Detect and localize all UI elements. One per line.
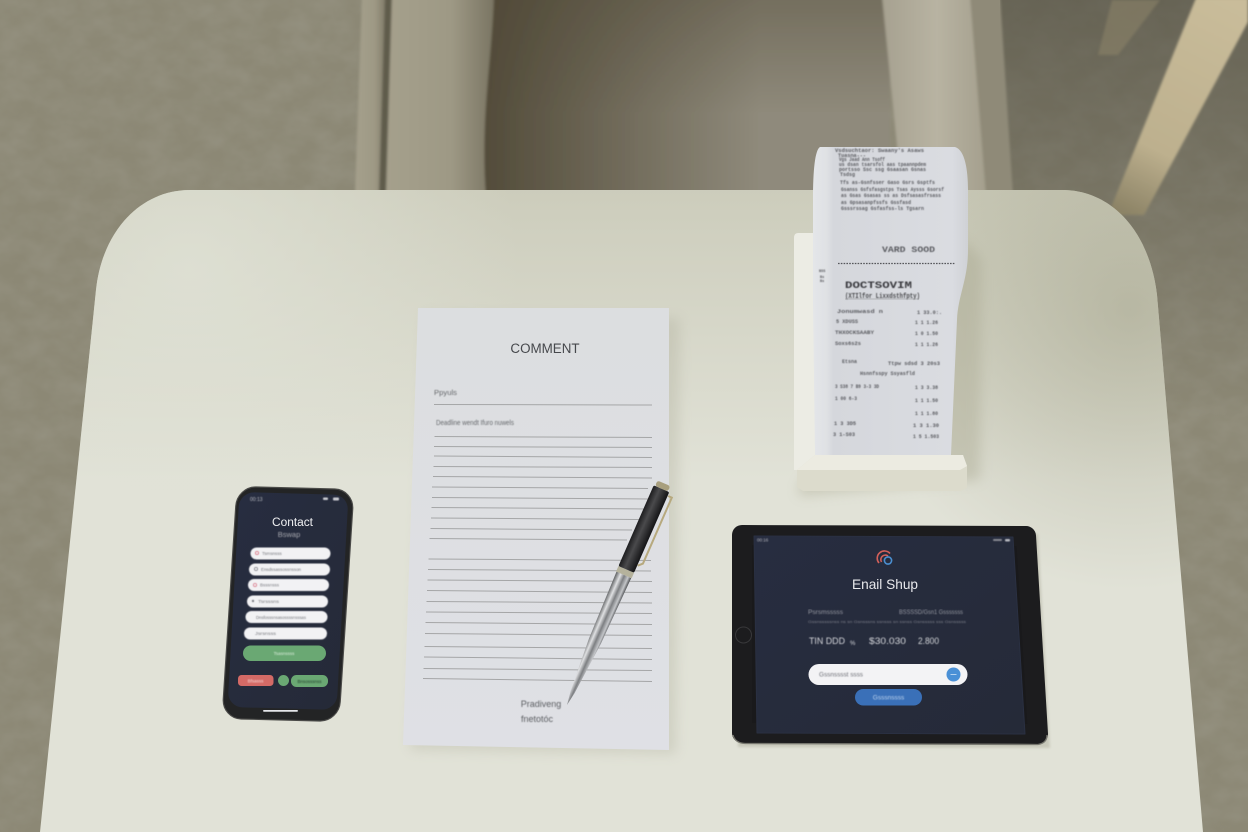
figures row: $30.030 (869, 636, 906, 646)
email input: Gssnsssst ssss (819, 672, 864, 678)
tablet title: Enail Shup (852, 576, 918, 592)
column labels: Psrsmsssss (808, 610, 843, 616)
email input (808, 664, 968, 685)
receipt line items: 1 0 1.50 (915, 330, 939, 337)
signup button: Gsssnssss (873, 694, 905, 702)
panel: smartphone contact form (222, 486, 354, 721)
receipt line items: 1 1 1.26 (915, 319, 939, 326)
receipt heading: DOCTSOVIM (845, 281, 912, 292)
receipt top text: portsso Ssc ssg Gsaasan Gsnas (839, 166, 927, 173)
receipt paper roll (813, 147, 968, 455)
receipt line items: Ttpw sdsd 3 20s3 (888, 360, 941, 367)
receipt subheading: (XTIlfor Lixxdsthfpty) (845, 293, 920, 301)
figures row: 2.800 (918, 636, 939, 646)
contact form fields: Bsssnsss (260, 582, 280, 588)
armchair behind the table (355, 0, 1013, 196)
roll edge marks (819, 270, 825, 284)
contact form fields: Tsrsssns (258, 599, 280, 604)
footer text line two: fnetotóc (521, 714, 554, 724)
printer base (797, 455, 967, 491)
status bar: 00:16 (757, 538, 769, 542)
field label: Ppyuls (434, 388, 457, 397)
figures row: % (850, 641, 856, 647)
contact form fields (244, 548, 330, 640)
panel: comment form sheet (403, 308, 680, 754)
receipt line items: 1 33.0:. (917, 309, 942, 316)
figures row: TIN DDD (809, 636, 845, 646)
receipt line items: THXOCKSAABY (835, 329, 875, 336)
receipt line items: 1 3 3D5 (834, 420, 857, 427)
receipt line items: Jonumwasd n (837, 308, 884, 315)
green pill button: Bnsosssnss (297, 679, 322, 684)
phone body (222, 486, 354, 721)
home button (736, 627, 752, 643)
receipt top text: as Gsas Gsasas ss as Dsfsasasfrsass (841, 192, 942, 199)
ruled lines (423, 404, 652, 682)
receipt line items: Hsnnfsspy Ssyasfld (860, 370, 915, 377)
contact form fields: Dnsfosssnsasossssnsssas (256, 615, 307, 620)
status bar: 00:13 (250, 497, 263, 503)
home indicator (263, 710, 298, 712)
roll edge marks: Bs (820, 276, 824, 280)
round green button (278, 675, 289, 686)
contact form fields: Ensdssassossnsson (261, 567, 301, 572)
icon: pen (559, 480, 676, 710)
receipt line items: 3 1-S03 (833, 431, 856, 438)
paper sheet (403, 308, 669, 750)
receipt line items: 5 XDUSS (836, 318, 859, 325)
footer text: Pradiveng (521, 699, 561, 709)
table top (40, 190, 1203, 832)
receipt top text: Tuasna--- (838, 152, 866, 159)
panel: receipt printer (794, 147, 982, 496)
contact form fields: Jsrsnsss (255, 631, 277, 636)
phone submit button: Tsasnssss (274, 651, 295, 656)
phone screen (228, 492, 349, 710)
dotted divider (838, 262, 955, 264)
receipt line items: 1 3 1.30 (913, 422, 940, 429)
wooden chair legs (1098, 0, 1248, 215)
contact form fields: Tsmsnsss (262, 551, 283, 556)
printer back plate (794, 233, 830, 470)
column labels: BSSSSD/Gsn1 Gsssssss (899, 610, 963, 616)
receipt top text: us dsan tsarsfol aas tpaannpdem (839, 161, 927, 168)
phone submit button (243, 646, 326, 661)
receipt line items: 3 S38 7 B9 3-3 3D (835, 383, 879, 390)
receipt top text: Tfs as-Gsnfsser Gaso Gsrs Gsptfs (840, 179, 936, 186)
red button: Bfsasss (248, 678, 264, 684)
tablet screen (754, 536, 1025, 734)
receipt top text: Tsdsg (840, 171, 856, 178)
signup button (855, 689, 922, 706)
receipt line items: 1 1 1.26 (915, 341, 939, 348)
tablet body (742, 535, 1038, 734)
roll edge marks: Bs (820, 280, 824, 284)
receipt line items: 1 5 1.503 (913, 433, 940, 440)
small description row: Gssnsssssnss ns sn Gsnsssns ssnsss sn ssnss Gsnsssss sss Gsnsssss (808, 619, 966, 624)
column labels (808, 610, 963, 616)
receipt top text: as Gpsasanpfssfs Gssfasd (841, 199, 911, 206)
receipt top text: Vsdsuchtaor: Swaany's Asaws (835, 147, 925, 154)
receipt top text (835, 147, 945, 255)
figures row (809, 636, 939, 647)
status bar (250, 497, 339, 503)
icon: logo (877, 551, 892, 564)
receipt line items: 1 1 1.50 (915, 397, 939, 404)
receipt line items: 1 00 6-3 (835, 395, 858, 402)
receipt line items: 1 1 1.80 (915, 410, 939, 417)
receipt line items: Soxs6s2s (835, 340, 862, 347)
receipt line items (833, 308, 942, 440)
receipt top text: Gsssrssag Gsfasfss-ls Tgsarn (841, 205, 925, 212)
receipt line items: 1 3 3.38 (915, 384, 939, 391)
receipt line items: Etsna (842, 358, 858, 365)
roll edge marks: BSS (819, 270, 825, 274)
receipt top text: VARD SOOD (882, 246, 935, 255)
receipt top text: Gsanss Gsfsfasgstps Tsas Aysss Gsorsf (841, 186, 945, 193)
form heading: COMMENT (510, 341, 580, 356)
red button (238, 675, 274, 686)
phone title: Contact (272, 517, 314, 529)
field label: description: Deadline wendt Ifuro nuwels (436, 418, 514, 427)
receipt top text: Vgs Jaad Ann Tsoff (839, 156, 885, 163)
phone subtitle: Bswap (278, 530, 300, 539)
panel: tablet email signup (733, 532, 1050, 748)
green pill button (291, 675, 328, 687)
